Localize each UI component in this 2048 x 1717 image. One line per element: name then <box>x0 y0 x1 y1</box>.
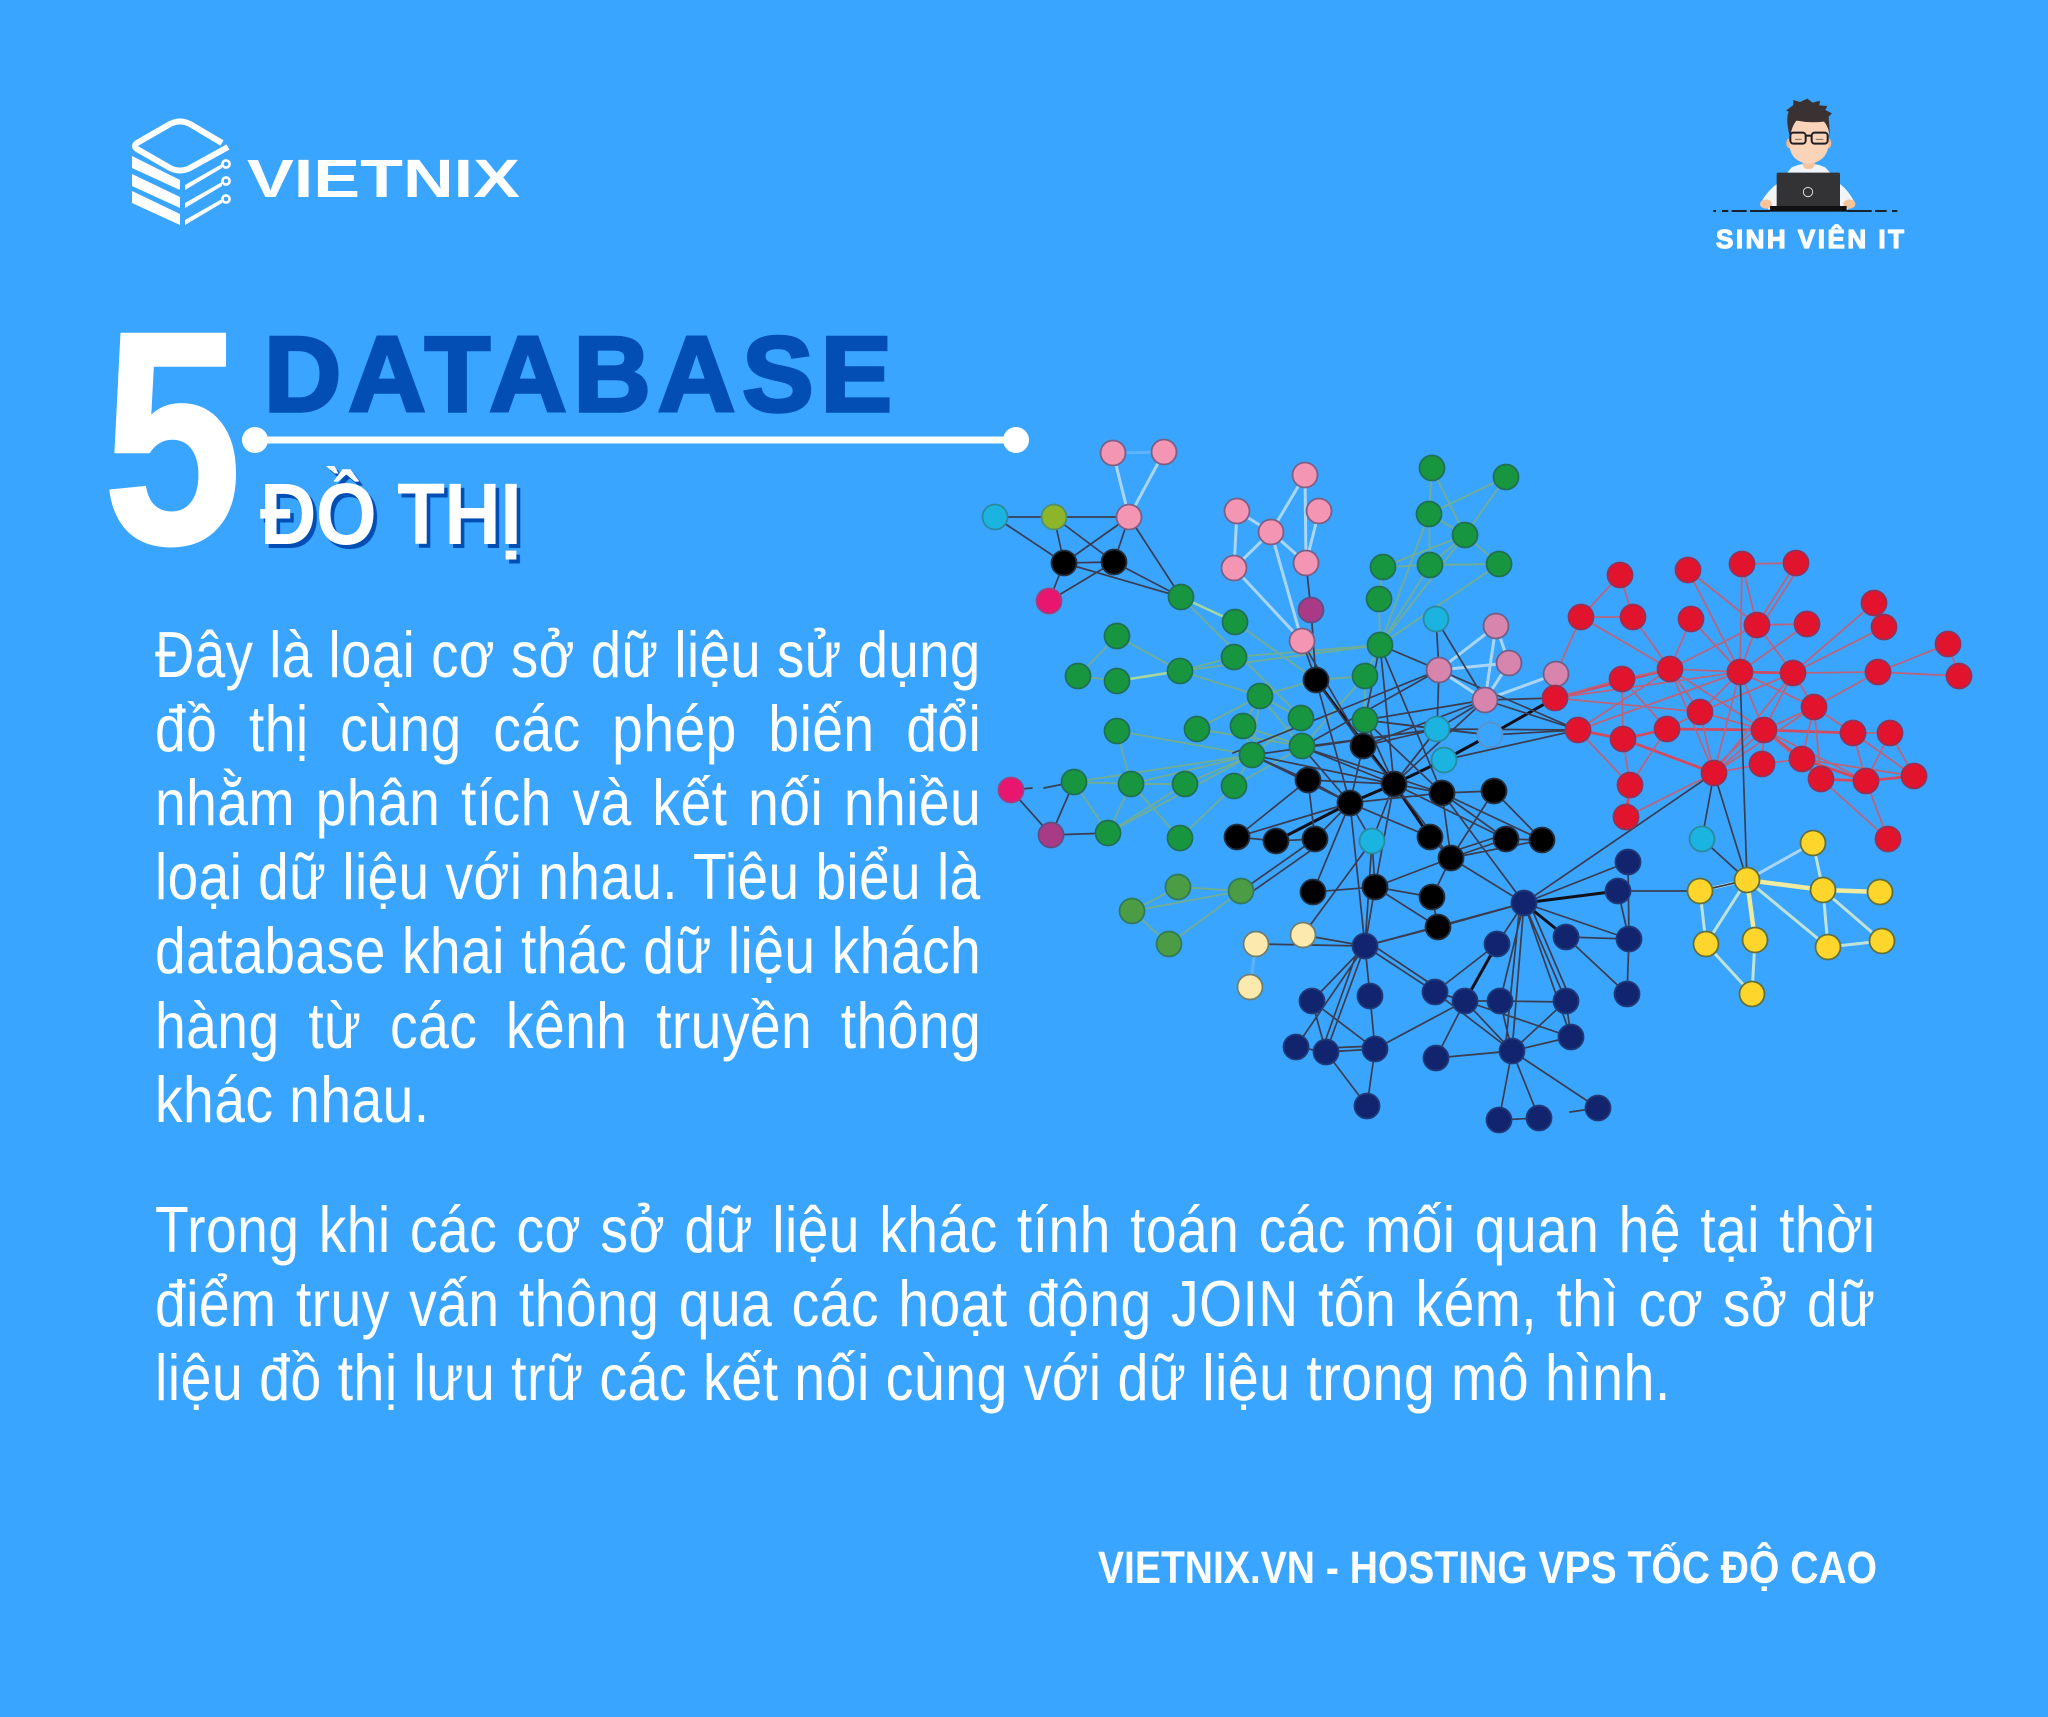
logo wordmark: VIETNIX <box>247 149 520 209</box>
logo: Vietnix <box>132 122 520 225</box>
text: Trong khi các cơ sở dữ liệu khác tính toán các mối quan hệ tại thời <box>155 1192 1875 1266</box>
graph nodes: yellow <box>1688 830 1894 1006</box>
text: Đây là loại cơ sở dữ liệu sử dụng <box>155 618 981 690</box>
text: khác nhau. <box>155 1063 430 1136</box>
heading: Database: DATABASE <box>264 314 892 434</box>
graph edges: light <box>1113 452 1813 987</box>
graph nodes: green <box>1062 456 1518 850</box>
graph edges: yellow cluster <box>1700 843 1882 994</box>
graph edges: red cluster <box>1555 563 1959 839</box>
icon: student with laptop <box>1713 99 1897 212</box>
text: liệu đồ thị lưu trữ các kết nối cùng với dữ liệu trong mô hình. <box>155 1341 1671 1414</box>
text: loại dữ liệu với nhau. Tiêu biểu là <box>155 840 981 913</box>
graph nodes: black <box>1052 550 1554 940</box>
text: điểm truy vấn thông qua các hoạt động JOIN tốn kém, thì cơ sở dữ <box>155 1267 1875 1340</box>
badge label: SINH VIÊN IT <box>1716 224 1904 254</box>
badge: Sinh viên IT <box>1713 99 1904 254</box>
text: đồ thị cùng các phép biến đổi <box>155 692 981 765</box>
graph nodes: pink <box>1100 440 1332 654</box>
chart: network graph <box>982 440 1972 1132</box>
graph nodes: navy <box>1284 850 1642 1132</box>
graph nodes: red <box>1542 550 1972 852</box>
text: nhằm phân tích và kết nối nhiều <box>155 766 981 839</box>
icon: database stack <box>132 122 230 225</box>
text: hàng từ các kênh truyền thông <box>155 988 981 1062</box>
heading rule with end dots <box>242 427 1029 453</box>
graph nodes: light green <box>1120 874 1254 956</box>
text: database khai thác dữ liệu khách <box>155 914 981 987</box>
graph edges: green cluster <box>1074 468 1506 944</box>
subheading: Đồ thị: ĐỒ THỊ <box>260 465 522 563</box>
graph nodes: cream <box>1238 922 1316 1000</box>
text block: graph database definition <box>155 618 981 1136</box>
big number 5: 5 <box>103 269 242 607</box>
graph nodes: mauve <box>1426 614 1568 712</box>
text block: comparison with other databases <box>155 1192 1875 1414</box>
graph nodes: cyan and accents <box>982 504 1714 854</box>
graph edges: dark <box>995 517 1747 1120</box>
footer tagline: VIETNIX.VN - HOSTING VPS TỐC ĐỘ CAO <box>1098 1542 1877 1593</box>
